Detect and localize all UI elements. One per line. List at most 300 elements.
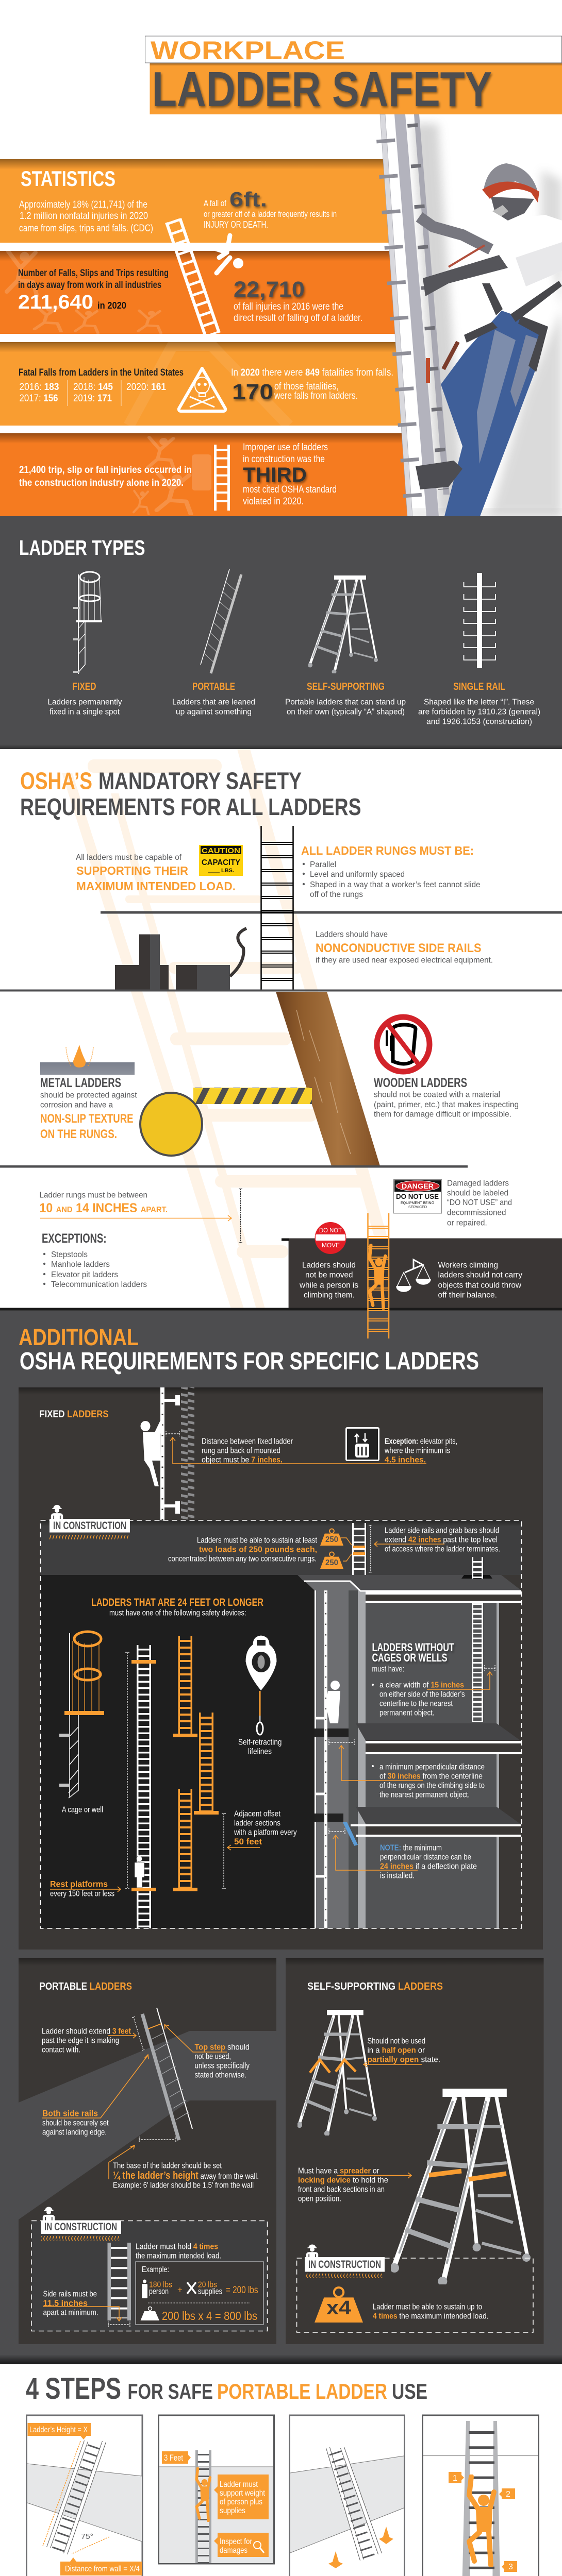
band: light beam — [19, 2031, 276, 2219]
text: portable: up against something — [176, 708, 252, 716]
label: in construction three — [305, 2244, 385, 2278]
label: in construction two — [41, 2207, 121, 2241]
dimension: base distance — [139, 2137, 176, 2143]
section: four steps — [25, 2372, 538, 2576]
panel: construction industry — [0, 433, 407, 516]
icon: self-retracting lifeline — [245, 1635, 277, 1735]
text: spreader: Must have a spreader or — [298, 2167, 379, 2175]
panel: days away from work — [0, 218, 395, 337]
text: exceptions: Stepstools — [51, 1250, 88, 1259]
text: nonconductive side rails: Ladders should have — [316, 930, 388, 939]
text: note: perpendicular distance can be — [380, 1853, 471, 1862]
text: seven inches: Distance between fixed ladder — [202, 1437, 293, 1446]
text: both side rails: should be securely set — [42, 2119, 109, 2128]
panel: OSHA mandatory requirements — [0, 749, 562, 1309]
text: exceptions: EXCEPTIONS: — [42, 1231, 106, 1246]
label: in construction two: IN CONSTRUCTION — [44, 2221, 117, 2233]
stat: 22,710: of fall injuries in 2016 were the — [234, 301, 343, 312]
icon: orange climber — [370, 1245, 385, 1308]
text: fixed: FIXED — [72, 681, 96, 692]
text: wooden ladders: (paint, primer, etc.) that makes inspecting — [374, 1100, 519, 1109]
icon: do not move sign: DO NOT — [319, 1227, 342, 1234]
text: base distance — [113, 2162, 259, 2190]
panel: step one place: 75° — [81, 2532, 93, 2541]
panel: step two inspect — [159, 2415, 274, 2564]
roof ladder and hatch — [461, 1557, 492, 1579]
stat: third most cited: in construction was the — [243, 454, 325, 465]
stat: 22,710: direct result of falling off of a ladder. — [234, 313, 362, 324]
heading: fatal falls: Fatal Falls from Ladders in the United States — [19, 367, 184, 378]
text: nonfatal injuries: 1.2 million nonfatal injuries in 2020 — [20, 211, 148, 222]
text: spreader: locking device to hold the — [298, 2176, 388, 2184]
icon: tools — [187, 2282, 196, 2294]
box: self-supporting in construction — [297, 2244, 533, 2332]
icon: electrical equipment — [115, 928, 246, 990]
panel: fixed ladders — [19, 1387, 543, 1950]
small climber — [326, 1681, 340, 1723]
box: portable in construction — [31, 2207, 267, 2331]
callout: weight — [214, 2475, 269, 2519]
text: portable — [172, 681, 255, 716]
text: falls slips trips — [18, 268, 169, 291]
text: spreader — [298, 2167, 388, 2203]
title line: WORKPLACE — [145, 36, 562, 65]
text: without cages — [372, 1641, 454, 1664]
arrow: spreader — [337, 2173, 411, 2178]
arrow: three feet — [108, 2033, 136, 2038]
text: self-supporting: on their own (typically “A” shaped) — [287, 708, 405, 716]
text: do not move: while a person is — [299, 1281, 358, 1290]
arrow: rung spacing — [40, 1215, 232, 1221]
text: damaged ladders: should be labeled — [447, 1189, 508, 1197]
heading: OSHA mandatory — [20, 768, 361, 820]
text: exceptions: Telecommunication ladders — [51, 1280, 147, 1289]
icon: danger do not use sign: DANGER — [402, 1182, 434, 1190]
text: note: NOTE: the minimum — [380, 1843, 442, 1853]
icon: do not move sign: MOVE — [322, 1242, 340, 1249]
text: metal ladders: ON THE RUNGS. — [40, 1127, 117, 1141]
icon: no paint sign — [377, 1017, 429, 1072]
icon: orange ladder — [368, 1213, 389, 1338]
box: weight example: 200 lbs x 4 = 800 lbs — [162, 2309, 257, 2323]
arrow: half open — [363, 2062, 422, 2067]
text: must have: centerline to the nearest — [379, 1699, 453, 1708]
image: wood plank — [276, 992, 380, 1166]
text: rung spacing — [39, 1191, 168, 1215]
icon: ladder — [195, 2450, 211, 2563]
text: note: is installed. — [380, 1871, 415, 1880]
text: rungs must be: Shaped in a way that a worker’s feet cannot slide — [310, 880, 481, 889]
text: exceptions — [42, 1231, 147, 1289]
arrow: side rails — [43, 2307, 122, 2321]
icon: top ladder with orange rungs — [352, 1523, 366, 1575]
text: note — [380, 1843, 477, 1880]
text: three feet: past the edge it is making — [42, 2036, 119, 2045]
text: nonconductive side rails: if they are used near exposed electrical equipment. — [316, 956, 493, 964]
label: in construction three: IN CONSTRUCTION — [308, 2259, 381, 2270]
icon: black ladder — [261, 826, 293, 990]
knee shadow — [416, 461, 462, 489]
icon: caution capacity sign: CAUTION — [202, 846, 240, 855]
text: thirty inches: a minimum perpendicular distance — [379, 1763, 485, 1771]
text: wooden ladders — [374, 1076, 519, 1119]
text: rungs must be: ALL LADDER RUNGS MUST BE: — [301, 844, 474, 857]
harness and belt — [464, 281, 562, 372]
text: balance: objects that could throw — [438, 1281, 521, 1290]
text: adjacent offset — [234, 1809, 297, 1846]
illustration: fixed ladder rail — [160, 1387, 180, 1520]
box: weight example — [136, 2262, 263, 2325]
text: four times: Ladder must be able to sustain up to — [373, 2303, 482, 2311]
text: maximum load — [76, 853, 236, 893]
illustration: building — [297, 1575, 521, 1928]
region: construction header — [40, 1520, 522, 1575]
text: must have — [372, 1665, 465, 1718]
text: side rails — [43, 2290, 98, 2317]
text: top step — [195, 2043, 250, 2079]
text: two loads: Ladders must be able to sustain at least — [197, 1536, 317, 1545]
text: half open — [367, 2037, 440, 2064]
text: spreader: front and back sections in an — [298, 2185, 385, 2194]
icon: cone right — [379, 2527, 393, 2544]
text: six foot fall: INJURY OR DEATH. — [204, 219, 268, 230]
text: do not move — [299, 1261, 358, 1299]
title board — [145, 36, 562, 117]
icon: 250 weights: 250 — [325, 1535, 338, 1544]
icon: ladder — [461, 2421, 501, 2576]
dimension: rung spacing — [239, 1189, 242, 1243]
text: do not move: Ladders should — [302, 1261, 356, 1269]
icon: offset ladders — [173, 1636, 219, 1891]
text: damaged ladders — [447, 1179, 512, 1227]
title banner: LADDER SAFETY: LADDER SAFETY — [152, 62, 492, 117]
text: construction injuries: the construction industry alone in 2020. — [19, 478, 184, 488]
callout: inspect: damages — [220, 2546, 247, 2555]
stat: 211,640: 211,640 — [18, 292, 93, 313]
text: top step: Top step should — [195, 2043, 250, 2052]
dimension: fifteen inches — [485, 1665, 495, 1671]
icon: caution capacity sign: LBS. — [221, 868, 234, 874]
callout: numbers: 1 — [453, 2474, 457, 2483]
text: exceptions: Manhole ladders — [51, 1260, 110, 1269]
text: thirty inches: the nearest permanent object. — [379, 1791, 470, 1799]
heading: self-supporting ladders: SELF-SUPPORTING LADDERS — [307, 1981, 443, 1992]
text: 42 inches: extend 42 inches past the top level — [385, 1535, 498, 1545]
text: fixed: fixed in a single spot — [49, 708, 120, 716]
callout: distance — [60, 2557, 142, 2575]
text: both side rails — [42, 2108, 109, 2137]
stat: third most cited: THIRD — [243, 464, 307, 486]
stat: 849 fatalities: In 2020 there were 849 fatalities from falls. — [231, 367, 393, 378]
box: weight example: + — [177, 2285, 183, 2295]
text: lifelines: lifelines — [248, 1748, 272, 1756]
heading: portable ladders: PORTABLE LADDERS — [39, 1981, 132, 1992]
text: half open: in a half open or — [367, 2046, 425, 2055]
text: thirty inches: of the rungs on the climbing side to — [379, 1782, 485, 1790]
panel: dark moving and balance box — [282, 1222, 562, 1309]
icon: cage or well — [59, 1632, 104, 1798]
icon: self-supporting ladder — [308, 575, 378, 674]
dimension: thirty inches — [329, 1739, 354, 1745]
icon: skull warning triangle — [179, 368, 225, 411]
heading: four steps: PORTABLE LADDER — [217, 2379, 387, 2403]
icon: large stepladder — [390, 2089, 531, 2286]
table: falls by year — [20, 380, 166, 406]
text: damaged ladders: decommissioned — [447, 1209, 506, 1217]
text: without cages: CAGES OR WELLS — [372, 1651, 448, 1664]
heading: four steps: FOR SAFE — [128, 2379, 213, 2403]
text: note: 24 inches if a deflection plate — [380, 1862, 477, 1871]
text: exceptions: Elevator pit ladders — [51, 1270, 118, 1279]
text: six foot fall — [204, 189, 337, 230]
icon: portable ladder — [201, 569, 241, 673]
text: half open: partially open state. — [367, 2056, 440, 2064]
text: six foot fall: 6ft. — [229, 189, 267, 211]
text: two loads — [168, 1536, 317, 1563]
text: two loads: concentrated between any two consecutive rungs. — [168, 1555, 317, 1563]
stat: 170: were falls from ladders. — [274, 391, 358, 401]
heading: OSHA mandatory: REQUIREMENTS FOR ALL LADDERS — [20, 793, 361, 820]
text: adjacent offset: Adjacent offset — [234, 1809, 280, 1819]
text: exception: where the minimum is — [384, 1447, 450, 1455]
text: self-supporting: SELF-SUPPORTING — [307, 681, 385, 692]
icon: danger do not use sign: DO NOT USE — [396, 1192, 439, 1200]
text: must have: permanent object. — [379, 1708, 434, 1718]
text: maximum load: MAXIMUM INTENDED LOAD. — [76, 879, 236, 893]
dimension: three feet — [132, 2016, 145, 2050]
panel: step four climb — [423, 2415, 538, 2576]
text: four times: 4 times the maximum intended load. — [373, 2312, 489, 2320]
text: exception: Exception: elevator pits, — [385, 1437, 457, 1446]
text: nonconductive side rails — [316, 930, 493, 964]
heading: four steps: USE — [392, 2379, 427, 2403]
text: single rail — [418, 681, 540, 726]
icon: corrosion drop — [40, 1045, 135, 1075]
box: weight example: 180 lbs — [149, 2280, 172, 2290]
stat: 22,710: 22,710 — [234, 277, 305, 302]
icon: caution capacity sign — [199, 845, 243, 876]
background: faint ladder — [62, 749, 407, 1309]
table: falls by year: 2018: 145 — [73, 382, 113, 393]
text: wooden ladders: WOODEN LADDERS — [374, 1076, 467, 1090]
callout: height — [28, 2423, 91, 2439]
callout: height: Ladder’s Height = X — [29, 2426, 88, 2434]
arms — [419, 217, 491, 249]
icon: balance scale — [396, 1260, 431, 1292]
icon: non-slip yellow rung end — [140, 1093, 202, 1156]
callout: weight: Ladder must — [220, 2480, 258, 2489]
watermark: falling figures — [7, 251, 161, 333]
text: top step: unless specifically — [195, 2062, 250, 2070]
icon: white ladder — [214, 445, 230, 511]
icon: do not move sign — [315, 1222, 346, 1254]
text: metal ladders: corrosion and have a — [40, 1100, 113, 1110]
text: top step: stated otherwise. — [195, 2071, 246, 2079]
text: fixed — [47, 681, 122, 716]
stat: third most cited: most cited OSHA standard — [243, 484, 337, 495]
text: damaged ladders: Damaged ladders — [447, 1179, 509, 1188]
callout: weight: supplies — [220, 2506, 245, 2515]
watermark: falling figures — [134, 437, 211, 515]
text: balance: ladders should not carry — [438, 1270, 522, 1280]
arrow: top step — [164, 2025, 227, 2052]
label: in construction one: IN CONSTRUCTION — [53, 1520, 126, 1532]
text: must have: must have: — [372, 1665, 404, 1673]
divider: floor — [0, 989, 562, 991]
icon: caution capacity sign: CAPACITY — [202, 858, 240, 867]
icon: white weight — [140, 2307, 159, 2320]
fixed ladder on building — [324, 1590, 327, 1928]
text: side rails: 11.5 inches — [43, 2298, 88, 2308]
text: four times: the maximum intended load. — [136, 2251, 221, 2261]
icon: gray ladder — [107, 2243, 131, 2320]
text: adjacent offset: with a platform every — [234, 1828, 297, 1837]
text: side rails: Side rails must be — [43, 2290, 97, 2299]
text: without cages: LADDERS WITHOUT — [372, 1641, 454, 1654]
icon: fixed ladder — [73, 572, 102, 674]
text: exception — [384, 1437, 457, 1464]
text: six foot fall: A fall of — [204, 198, 226, 208]
shirt — [484, 215, 562, 286]
text: damaged ladders: or repaired. — [447, 1219, 487, 1227]
text: half open: Should not be used — [367, 2037, 425, 2045]
text: 42 inches: Ladder side rails and grab bars should — [385, 1526, 499, 1535]
icon: danger do not use sign — [394, 1180, 441, 1213]
icon: climber — [196, 2468, 210, 2521]
stat: 211,640: in 2020 — [97, 300, 126, 311]
heading: additional — [19, 1324, 479, 1375]
arrow: both side rails — [42, 2055, 148, 2118]
heading: ladder types: LADDER TYPES — [19, 536, 145, 560]
text: falls slips trips: in days away from work in all industries — [18, 280, 161, 291]
divider: lower shelf — [0, 1165, 468, 1167]
box: weight example: Example: — [142, 2265, 169, 2274]
text: do not move: not be moved — [305, 1270, 353, 1280]
panel: self-supporting ladders — [286, 1958, 543, 2344]
callout: inspect: Inspect for — [220, 2537, 253, 2546]
icon: leaning ladder — [142, 2008, 192, 2140]
label: in construction one — [49, 1505, 130, 1539]
panel: portable ladders — [19, 1958, 276, 2344]
text: nonfatal injuries — [19, 199, 153, 234]
region: dark safety devices — [40, 1575, 315, 1928]
text: falls slips trips: Number of Falls, Slips and Trips resulting — [18, 268, 169, 279]
illustration: wall stripes — [181, 1387, 194, 1520]
text: must have: a clear width of 15 inches — [379, 1681, 464, 1690]
panel: statistics one — [0, 159, 389, 243]
text: spreader: open position. — [298, 2195, 341, 2203]
title line: WORKPLACE: WORKPLACE — [151, 36, 345, 65]
dimension: fifty feet — [222, 1814, 226, 1889]
icon: elevator sign — [346, 1428, 378, 1460]
text: seven inches: rung and back of mounted — [202, 1447, 280, 1455]
text: portable: Ladders that are leaned — [172, 698, 255, 707]
head and hard hat — [491, 197, 534, 221]
heading: 24 feet: LADDERS THAT ARE 24 FEET OR LONGER — [91, 1597, 263, 1608]
text: seven inches — [202, 1437, 293, 1464]
callout: distance: Distance from wall = X/4 — [65, 2565, 140, 2573]
icon: cone left — [328, 2551, 343, 2568]
text: must have: on either side of the ladder’s — [379, 1690, 465, 1699]
table: falls by year: 2020: 161 — [126, 382, 166, 393]
heading: statistics: STATISTICS — [21, 166, 115, 191]
text: base distance: ¼ the ladder’s height away from the wall. — [113, 2170, 259, 2181]
text: nonfatal injuries: Approximately 18% (211,741) of the — [19, 199, 147, 210]
text: six foot fall: or greater off of a ladder frequently results in — [204, 209, 337, 219]
inner tall ladder — [472, 1602, 483, 1722]
heading: 24 feet: must have one of the following safety devices: — [109, 1608, 246, 1618]
text: seven inches: object must be 7 inches. — [202, 1456, 283, 1464]
text: rungs must be: Level and uniformly spaced — [310, 870, 405, 879]
panel: additional requirements — [0, 1213, 562, 2364]
icon: climber — [469, 2477, 494, 2565]
icon: white ladder with falling worker — [167, 218, 243, 337]
callout: inspect — [214, 2533, 269, 2557]
stat: 170 — [232, 379, 358, 404]
icon: danger do not use sign: SERVICED — [408, 1206, 427, 1209]
jeans — [441, 311, 548, 516]
text: thirty inches: of 30 inches from the centerline — [379, 1772, 483, 1781]
icon: ladder — [46, 2441, 106, 2554]
text: adjacent offset: ladder sections — [234, 1819, 280, 1828]
divider: shelf line — [101, 911, 562, 914]
text: construction injuries — [19, 465, 192, 488]
icon: half-open stepladder — [297, 2010, 377, 2137]
text: rung spacing: Ladder rungs must be between — [39, 1191, 147, 1199]
callout: weight: of person plus — [220, 2498, 262, 2506]
text: 42 inches: of access where the ladder terminates. — [385, 1545, 500, 1554]
box: weight example: = 200 lbs — [226, 2285, 258, 2296]
heading: OSHA mandatory: OSHA’S — [20, 768, 92, 794]
text: base distance: Example: 6' ladder should be 1.5' from the wall — [113, 2181, 254, 2190]
box: weight example: 20 lbs — [198, 2280, 217, 2290]
text: rest platforms — [50, 1879, 121, 1898]
text: adjacent offset: 50 feet — [234, 1837, 262, 1846]
icon: rest platform ladder — [125, 1645, 156, 1928]
stat: third most cited: violated in 2020. — [243, 496, 304, 507]
text: three feet: contact with. — [42, 2045, 80, 2055]
text: self-supporting: Portable ladders that can stand up — [285, 698, 406, 707]
text: balance — [438, 1261, 522, 1299]
text: nonfatal injuries: came from slips, trips and falls. (CDC) — [19, 223, 153, 234]
text: four times — [373, 2303, 489, 2320]
callout: three feet — [162, 2451, 191, 2464]
dimension: side rails — [108, 2321, 130, 2328]
dimension: seven inches — [166, 1431, 179, 1436]
text: metal ladders: METAL LADDERS — [40, 1076, 121, 1090]
heading: OSHA mandatory: MANDATORY SAFETY — [98, 768, 302, 794]
arrow: fifteen inches — [427, 1672, 492, 1689]
text: single rail: are forbidden by 1910.23 (general) — [418, 708, 540, 716]
text: wooden ladders: should not be coated with a material — [374, 1090, 500, 1099]
heading: additional: ADDITIONAL — [19, 1324, 139, 1350]
table: falls by year: 2016: 183 — [20, 382, 59, 393]
text: four times: Ladder must hold 4 times — [136, 2242, 218, 2251]
arrow: seven inches — [170, 1437, 426, 1464]
text: wooden ladders: them for damage difficult or impossible. — [374, 1110, 511, 1119]
text: three feet: Ladder should extend 3 feet — [42, 2027, 131, 2036]
text: single rail: Shaped like the letter “I”. These — [424, 698, 534, 707]
outline: construction dashed box — [40, 1520, 522, 1928]
icon: single rail ladder — [464, 573, 495, 668]
illustration: worker on ladder — [380, 114, 562, 516]
text: cage or well: A cage or well — [62, 1805, 103, 1815]
stat: 170: 170 — [232, 379, 273, 404]
panel: step one place — [27, 2415, 142, 2576]
stat: 170: of those fatalities, — [274, 381, 339, 392]
table: falls by year: 2019: 171 — [73, 393, 112, 404]
icon: ladder — [326, 2447, 382, 2561]
